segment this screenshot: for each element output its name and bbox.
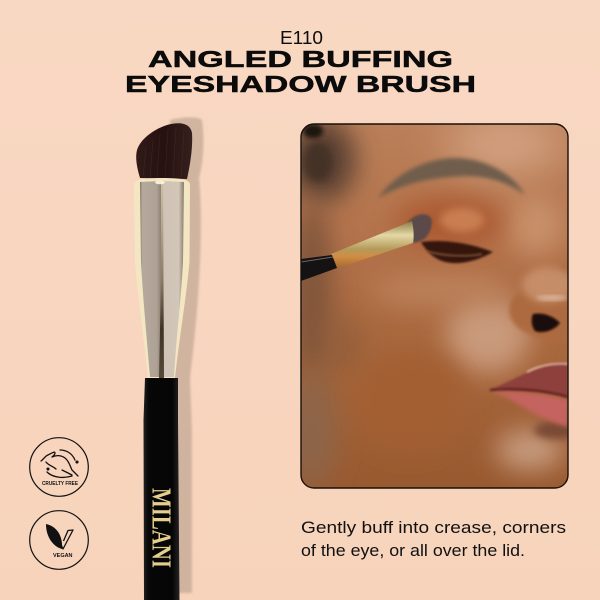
bristles — [136, 123, 192, 179]
description text: Gently buff into crease, corners — [301, 518, 566, 537]
brush product image — [134, 117, 203, 600]
forehead highlight — [445, 117, 565, 173]
applicator brush — [301, 214, 432, 281]
temple highlight — [505, 195, 565, 255]
eye lashes — [421, 241, 493, 263]
heading line two: EYESHADOW BRUSH — [125, 71, 476, 97]
icon: rabbit — [41, 450, 78, 477]
badge label: CRUELTY FREE — [42, 481, 79, 487]
badge: cruelty free — [30, 438, 88, 496]
handle logo: MILANI — [146, 488, 176, 568]
nose — [508, 293, 540, 336]
heading line one: ANGLED BUFFING — [148, 46, 453, 72]
black handle — [144, 378, 180, 600]
description text — [301, 518, 566, 560]
application photo — [288, 117, 578, 490]
lips — [490, 363, 568, 397]
badge: vegan — [30, 511, 88, 569]
hairline shadow — [288, 118, 356, 202]
cheek highlights — [446, 297, 530, 373]
left jaw shadow — [292, 200, 332, 380]
badge label: VEGAN — [53, 553, 73, 559]
eyebrow — [378, 158, 525, 198]
applicator ferrule — [331, 221, 414, 268]
under-lip shadow — [534, 421, 578, 439]
applicator handle — [301, 255, 337, 281]
brush cast shadow — [170, 117, 203, 593]
gold ferrule — [134, 178, 190, 378]
eyeshadow — [395, 197, 505, 247]
description text: of the eye, or all over the lid. — [301, 541, 525, 560]
product code: E110 — [280, 27, 323, 48]
icon: leaf and V — [46, 524, 73, 549]
applicator bristles — [408, 214, 432, 243]
title — [125, 27, 476, 97]
